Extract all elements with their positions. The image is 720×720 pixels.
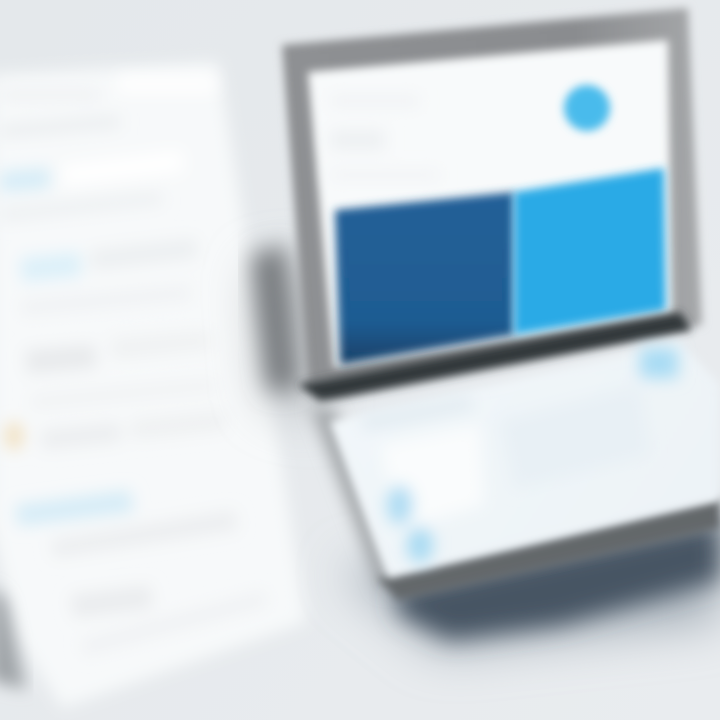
- laptop back support: [252, 245, 298, 390]
- document lines: [0, 76, 268, 656]
- screen header lines: [330, 95, 440, 180]
- laptop screen frame: [282, 8, 702, 385]
- laptop base edge: [378, 498, 720, 600]
- hinge: [298, 312, 692, 402]
- laptop base side left: [310, 405, 400, 590]
- shadow: document edge: [0, 585, 26, 690]
- icon: laptop: [252, 8, 720, 640]
- light blue panel: [514, 168, 666, 335]
- screen surface: [308, 40, 672, 368]
- laptop base underside: [395, 520, 720, 640]
- screen circle badge: [564, 85, 610, 131]
- deck details: [360, 348, 678, 563]
- dark blue panel: [335, 192, 514, 365]
- shadow: laptop: [255, 260, 720, 650]
- panel: paper document: [0, 62, 306, 708]
- laptop base deck: [330, 342, 720, 578]
